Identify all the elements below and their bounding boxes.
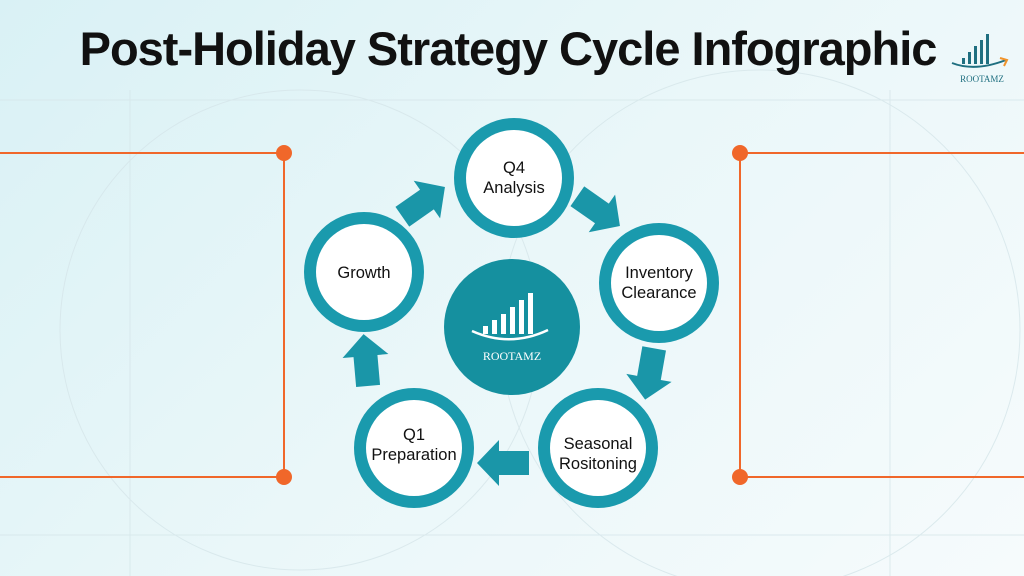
cycle nodes: Analysis	[483, 179, 545, 197]
cycle nodes: Growth	[337, 264, 391, 282]
top-right logo	[952, 34, 1007, 84]
top-right logo: ROOTAMZ	[960, 74, 1004, 84]
cycle nodes: Clearance	[621, 284, 697, 302]
cycle nodes	[304, 118, 719, 508]
cycle nodes: Seasonal	[564, 435, 632, 453]
cycle nodes: Q4	[503, 159, 525, 177]
cycle nodes: Rositoning	[559, 455, 637, 473]
center logo	[444, 259, 580, 395]
arrows	[341, 168, 677, 486]
title: Post-Holiday Strategy Cycle Infographic	[80, 22, 936, 75]
cycle nodes: Q1	[403, 426, 425, 444]
cycle nodes: Preparation	[371, 446, 457, 464]
center logo: ROOTAMZ	[483, 349, 541, 363]
cycle nodes: Inventory	[625, 264, 694, 282]
